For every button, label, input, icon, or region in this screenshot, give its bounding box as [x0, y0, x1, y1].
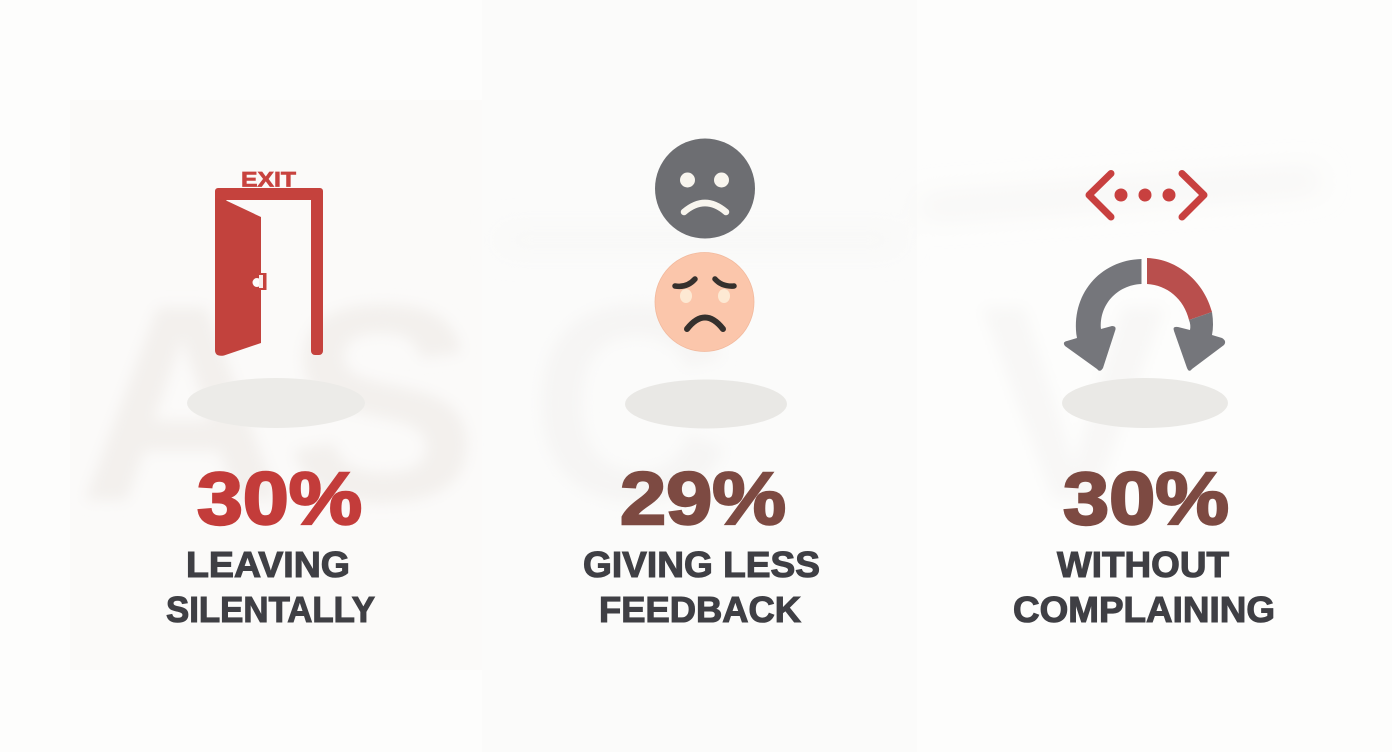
icon: diverging arrows [1064, 258, 1225, 371]
shadow ellipse [1062, 378, 1228, 428]
icon: exit door [215, 168, 323, 356]
stat: 30%: 30% [197, 457, 362, 540]
stat: 29%: 29% [620, 457, 786, 540]
icon: code ellipsis [1089, 174, 1204, 217]
exit sign: EXIT [241, 168, 296, 192]
panel: giving less feedback [583, 138, 820, 630]
shadow ellipse [187, 378, 365, 428]
text: AS [78, 248, 478, 560]
left arrow [1064, 259, 1142, 371]
label: without complaining: COMPLAINING [1013, 589, 1275, 630]
text: C [530, 248, 732, 560]
right arrow red segment [1147, 258, 1212, 320]
door handle [252, 273, 266, 290]
icon: crying face [655, 252, 754, 352]
text: V [980, 248, 1168, 560]
stat: 30%: 30% [1063, 457, 1229, 540]
door frame [215, 188, 323, 355]
right arrow grey segment [1174, 312, 1225, 371]
label: leaving silently: SILENTALLY [166, 589, 375, 630]
shadow ellipse [625, 380, 787, 428]
label: leaving silently: LEAVING [186, 544, 350, 585]
label: giving less feedback: FEEDBACK [599, 589, 801, 630]
icon: grey sad face [655, 138, 755, 238]
label: leaving silently [166, 544, 375, 630]
door leaf [215, 198, 261, 356]
label: giving less feedback [583, 544, 820, 630]
panel: leaving silently [166, 168, 375, 630]
label: without complaining: WITHOUT [1057, 544, 1229, 585]
panel: without complaining [1013, 174, 1275, 630]
label: giving less feedback: GIVING LESS [583, 544, 820, 585]
label: without complaining [1013, 544, 1275, 630]
